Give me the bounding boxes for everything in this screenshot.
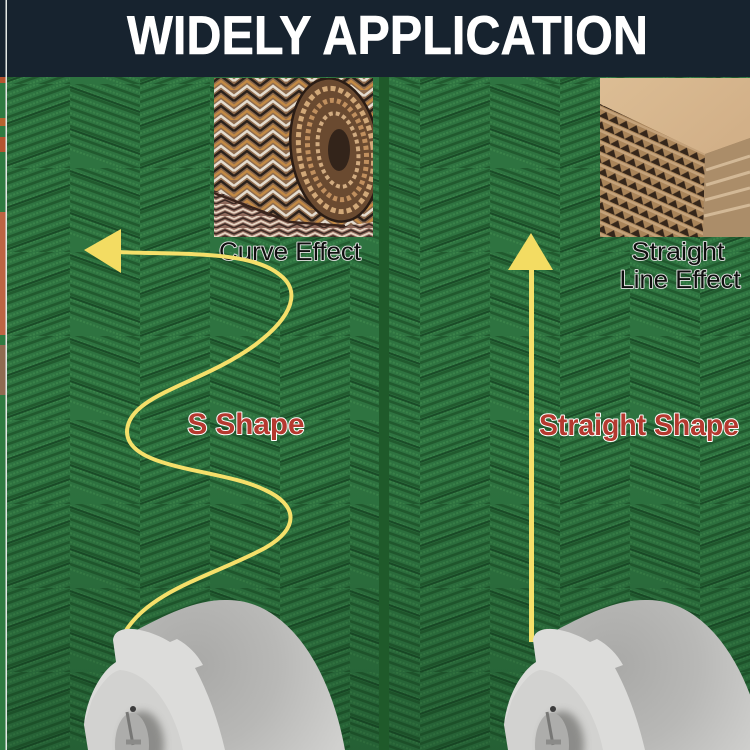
arrow: straight yellow line — [508, 233, 553, 642]
arrow: S-shaped yellow curve — [84, 229, 291, 632]
centre divider between panels — [379, 77, 389, 750]
label: S shape: S Shape — [188, 408, 304, 441]
label: straight line effect: Straight — [632, 238, 725, 266]
label: straight line effect: Line Effect — [620, 266, 741, 294]
left edge colour strip — [0, 0, 7, 750]
header band — [7, 0, 750, 77]
label: straight line effect — [620, 238, 741, 294]
photo: rolled herringbone carpet — [214, 78, 373, 237]
motor: right grey unit — [504, 600, 750, 750]
motor: left grey unit — [84, 600, 345, 750]
title: WIDELY APPLICATION — [127, 4, 648, 66]
label: curve effect: Curve Effect — [219, 238, 361, 266]
label: straight shape: Straight Shape — [539, 409, 739, 442]
photo: stacked corrugated cardboard — [600, 78, 750, 237]
